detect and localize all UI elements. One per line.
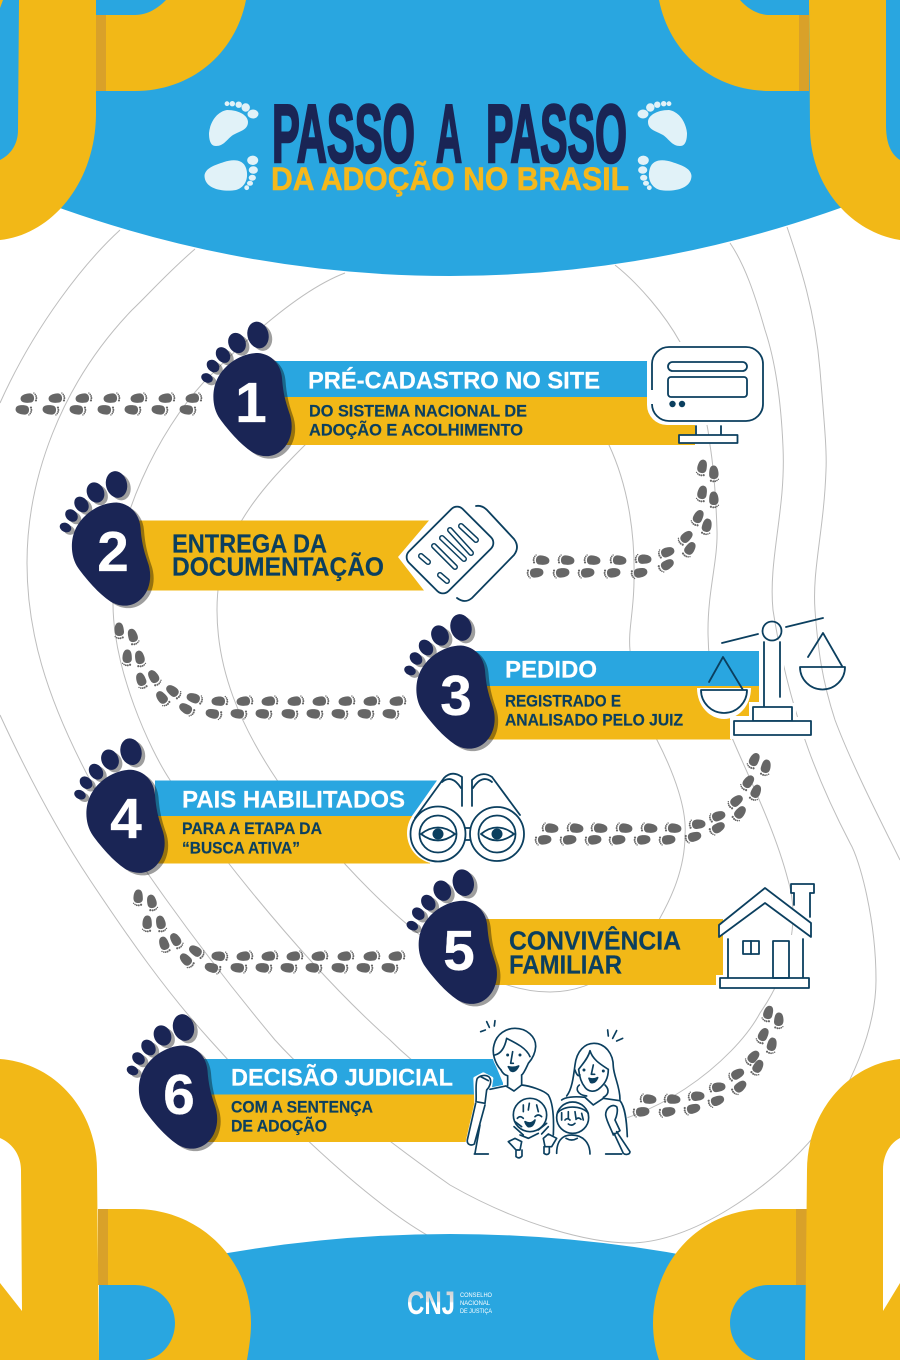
icon: numbered foot 4: 4 <box>110 787 142 851</box>
text: step 3 description: REGISTRADO E <box>505 692 621 711</box>
logo: CNJ: CONSELHO <box>460 1292 492 1299</box>
top-right yellow corner ornament <box>659 0 900 240</box>
logo: CNJ: CNJ <box>407 1285 455 1321</box>
woman <box>567 1043 620 1099</box>
icon: numbered foot 4 <box>73 736 168 875</box>
top-left yellow corner ornament <box>0 0 246 240</box>
boy <box>557 1135 590 1154</box>
icon: family illustration <box>467 1021 630 1158</box>
heading: step 5: CONVIVÊNCIA <box>509 925 681 955</box>
icon: numbered foot 5: 5 <box>443 919 475 983</box>
heading: step 2: DOCUMENTAÇÃO <box>172 552 384 582</box>
logo: CNJ: NACIONAL <box>460 1300 490 1307</box>
panel: step 6 <box>125 1012 630 1158</box>
icon: numbered foot 2 <box>58 469 154 608</box>
text: step 1 description <box>309 402 527 440</box>
footprint trail into step 1 <box>15 392 203 416</box>
icon: numbered foot 1: 1 <box>235 371 267 435</box>
bottom-right yellow corner ornament <box>653 1059 900 1360</box>
icon: house <box>719 884 814 988</box>
text: PASSO <box>486 87 627 180</box>
background contour lines <box>0 227 900 1243</box>
icon: numbered foot 6: 6 <box>163 1063 195 1127</box>
text: step 1 description: ADOÇÃO E ACOLHIMENTO <box>309 420 523 440</box>
heading: step 2 <box>172 529 384 582</box>
text: step 6 description: COM A SENTENÇA <box>231 1098 373 1117</box>
icon: binoculars <box>407 774 528 864</box>
text: step 3 description <box>505 692 683 730</box>
subtitle: DA ADOÇÃO NO BRASIL <box>271 161 629 197</box>
text: step 6 description <box>231 1098 373 1136</box>
panel: step 5 <box>405 867 814 1006</box>
footprint trail from step 1 to step 2 <box>526 459 720 580</box>
icon: numbered foot 1 <box>200 319 295 459</box>
man <box>493 1028 536 1075</box>
icon: numbered foot 6 <box>125 1012 221 1151</box>
text: step 3 description: ANALISADO PELO JUIZ <box>505 711 683 730</box>
icon: numbered foot 2: 2 <box>97 520 129 584</box>
girl <box>513 1098 547 1132</box>
footprint trail from step 5 to step 6 <box>632 1004 784 1119</box>
logo: CNJ: DE JUSTIÇA <box>460 1308 493 1315</box>
heading: step 3: PEDIDO <box>505 657 597 684</box>
text: step 4 description: “BUSCA ATIVA” <box>182 838 300 857</box>
title: PASSO <box>272 87 415 180</box>
text: step 4 description <box>182 819 322 857</box>
footer blue background <box>200 1234 700 1360</box>
icon: documents <box>403 503 517 601</box>
icon: numbered foot 3: 3 <box>440 664 472 728</box>
text: step 4 description: PARA A ETAPA DA <box>182 819 322 838</box>
heading: step 5: FAMILIAR <box>509 949 622 979</box>
icon: title footprints left <box>204 101 258 191</box>
bottom-left yellow corner ornament <box>0 1059 251 1360</box>
text: step 6 description: DE ADOÇÃO <box>231 1116 327 1136</box>
icon: numbered foot 3 <box>403 612 498 751</box>
icon: computer monitor <box>647 342 768 443</box>
icon: scales of justice <box>697 618 845 739</box>
text: step 1 description: DO SISTEMA NACIONAL DE <box>309 402 527 421</box>
heading: step 4: PAIS HABILITADOS <box>182 786 405 813</box>
heading: step 5 <box>509 925 681 979</box>
icon: numbered foot 5 <box>405 867 500 1006</box>
footprint trail from step 2 to step 3 <box>114 622 407 721</box>
footprint trail from step 3 to step 4 <box>534 751 772 846</box>
header blue background <box>0 0 900 276</box>
panel: step 3 <box>403 612 845 751</box>
icon: title footprints right <box>638 101 692 191</box>
panel: step 4 <box>73 736 528 875</box>
heading: step 6: DECISÃO JUDICIAL <box>231 1064 453 1092</box>
heading: step 1: PRÉ-CADASTRO NO SITE <box>308 366 600 394</box>
title: A <box>436 87 462 180</box>
panel: step 2 <box>58 469 517 608</box>
footprint trail from step 4 to step 5 <box>132 889 406 976</box>
heading: step 2: ENTREGA DA <box>172 529 327 559</box>
panel: step 1 <box>200 319 768 459</box>
